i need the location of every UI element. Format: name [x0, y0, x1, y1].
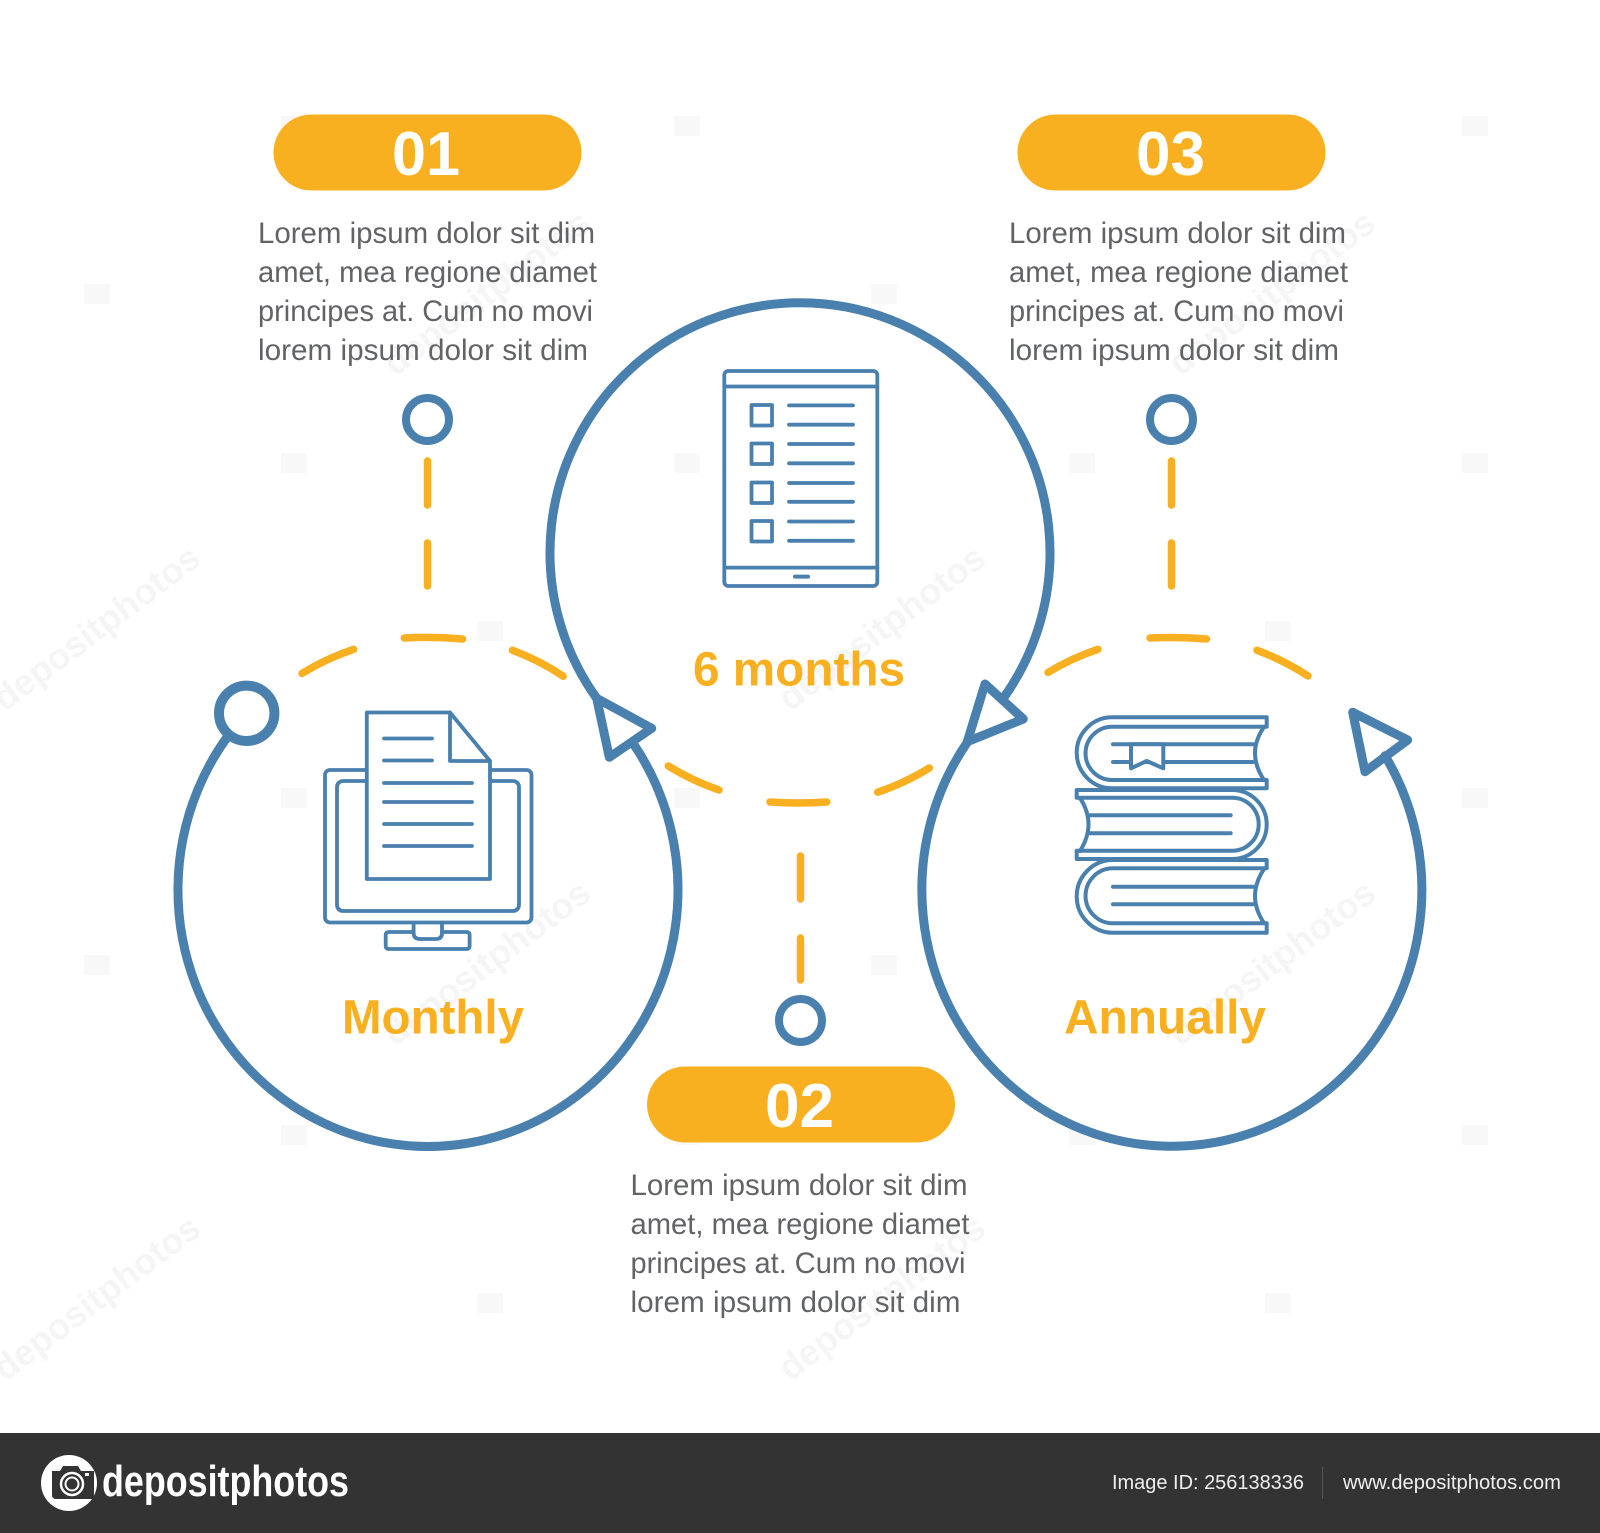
watermark: depositphotos	[375, 871, 598, 1053]
panel: step 02 footer	[630, 856, 970, 1319]
badge 01	[274, 114, 582, 190]
label: Annually: Annually	[1064, 992, 1266, 1044]
book bottom	[1077, 860, 1267, 933]
connector 02	[779, 856, 822, 1042]
top circle with arrow	[550, 303, 1050, 742]
text block 01	[258, 217, 598, 367]
watermark	[0, 116, 1488, 1388]
start node	[219, 686, 274, 741]
logo wordmark: depositphotos	[102, 1457, 349, 1506]
text block 02: amet, mea regione diamet	[630, 1208, 970, 1241]
image id: Image ID: 256138336	[1112, 1472, 1304, 1494]
text block 03: amet, mea regione diamet	[1009, 256, 1349, 289]
left circle with arrow	[178, 686, 678, 1146]
text block 01: lorem ipsum dolor sit dim	[258, 334, 588, 367]
badge 02	[647, 1066, 955, 1142]
text block 02: Lorem ipsum dolor sit dim	[630, 1169, 968, 1202]
watermark: depositphotos	[1160, 871, 1383, 1053]
website: www.depositphotos.com	[1342, 1472, 1561, 1494]
label: Monthly: Monthly	[342, 992, 524, 1044]
panel: step 03 header	[1009, 114, 1349, 586]
badge 03	[1018, 114, 1326, 190]
arrowhead right circle	[1353, 712, 1408, 772]
badge 01: 01	[392, 120, 460, 189]
text block 03: lorem ipsum dolor sit dim	[1009, 334, 1339, 367]
text block 02: lorem ipsum dolor sit dim	[630, 1286, 960, 1319]
badge 02: 02	[765, 1072, 834, 1141]
text block 03: principes at. Cum no movi	[1009, 295, 1344, 328]
text block 02: principes at. Cum no movi	[630, 1247, 966, 1280]
panel: step 01 header	[258, 114, 598, 586]
watermark: depositphotos	[375, 201, 598, 383]
badge 03: 03	[1136, 120, 1205, 189]
logo icon	[41, 1455, 97, 1511]
label: 6 months: 6 months	[693, 644, 905, 696]
text block 03	[1009, 217, 1349, 367]
icon: stack of books	[1077, 717, 1267, 933]
text block 01: principes at. Cum no movi	[258, 295, 593, 328]
icon: tablet checklist	[724, 371, 877, 586]
arrowhead top circle	[967, 684, 1023, 742]
watermark: depositphotos	[770, 1206, 993, 1388]
text block 03: Lorem ipsum dolor sit dim	[1009, 217, 1346, 250]
arrowhead left circle	[597, 698, 652, 757]
connector 01	[406, 398, 449, 586]
dashed arcs	[302, 637, 1308, 803]
footer bar	[0, 1433, 1600, 1533]
text block 01: Lorem ipsum dolor sit dim	[258, 217, 595, 250]
connector 03	[1150, 398, 1193, 586]
text block 02	[630, 1169, 970, 1319]
book middle	[1077, 790, 1267, 859]
book top	[1077, 717, 1267, 788]
watermark: depositphotos	[770, 536, 993, 718]
watermark: depositphotos	[1160, 201, 1383, 383]
text block 01: amet, mea regione diamet	[258, 256, 598, 289]
right circle with arrow	[922, 712, 1422, 1146]
icon: document on monitor	[325, 712, 532, 949]
